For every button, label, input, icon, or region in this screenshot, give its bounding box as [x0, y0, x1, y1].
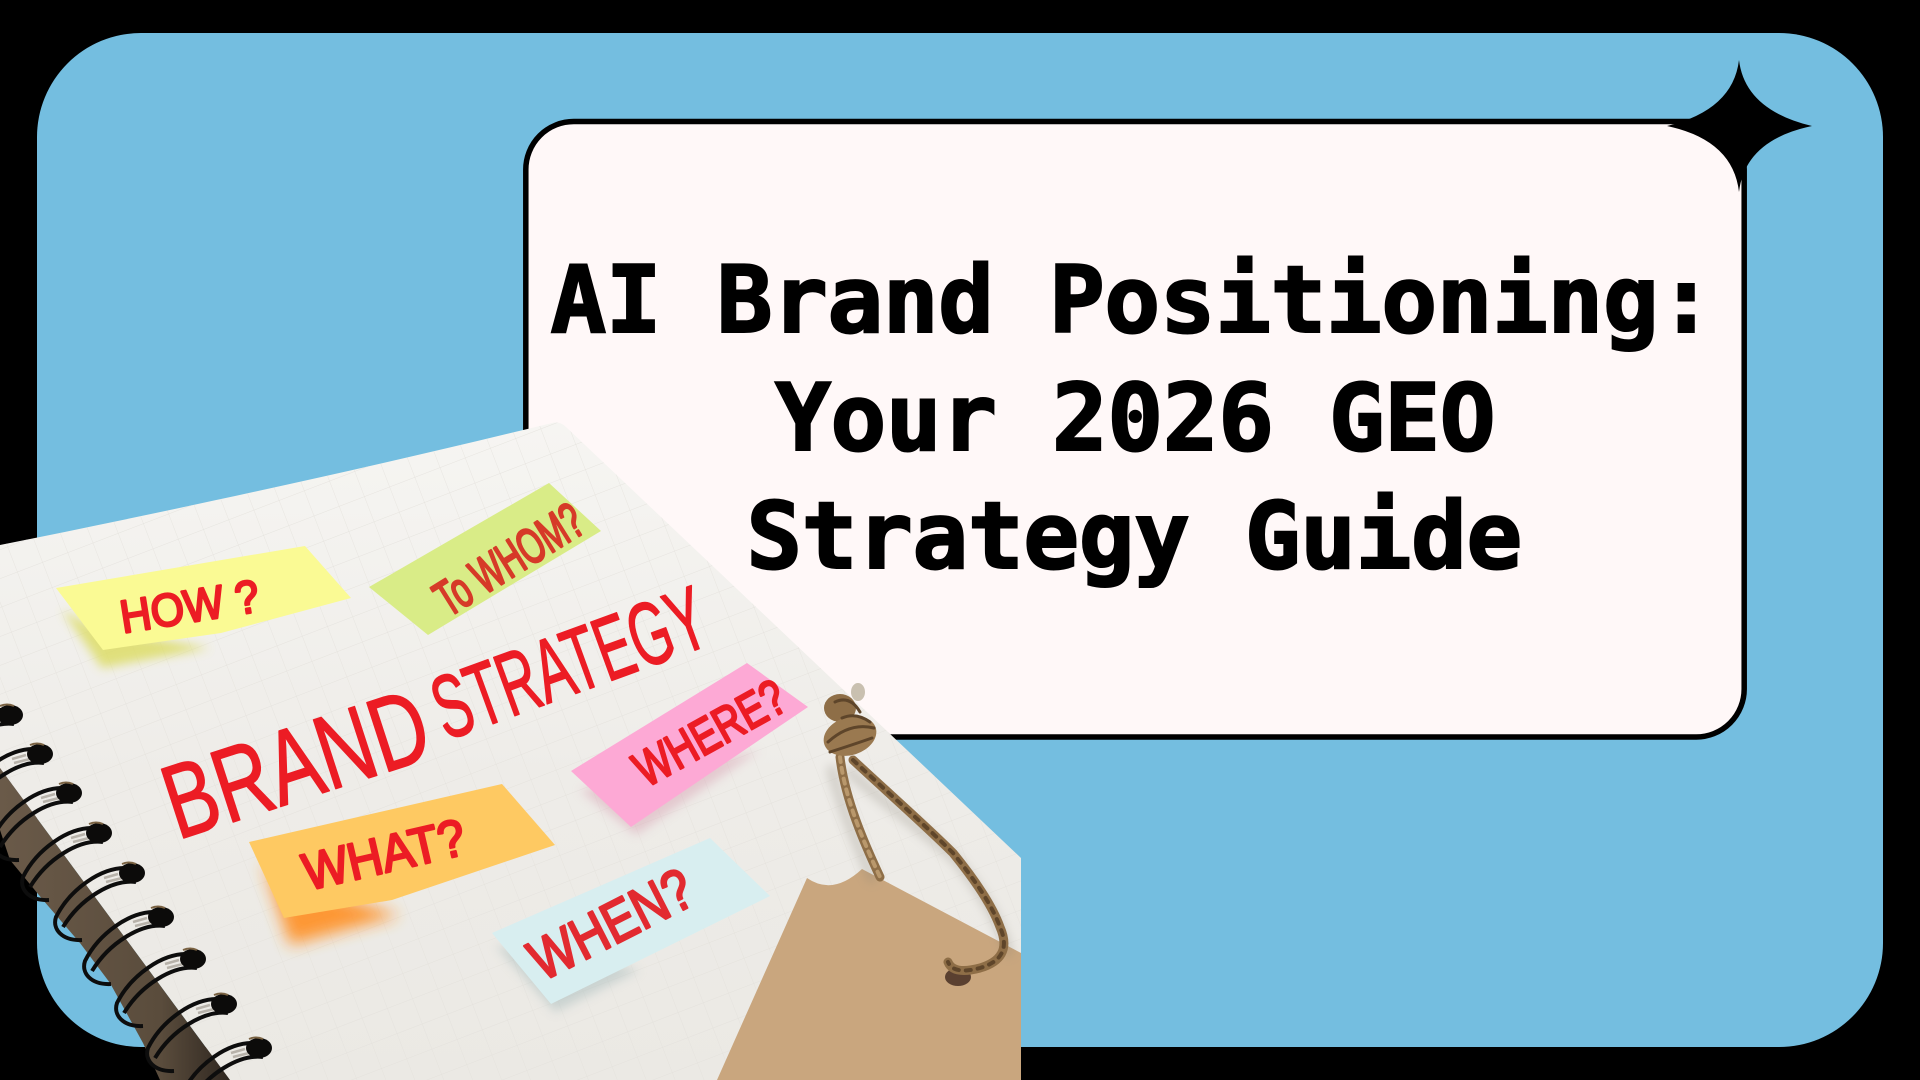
sticky note: how: HOW ?: [116, 570, 263, 643]
title: Strategy Guide: [746, 482, 1522, 590]
sticky note: what: [249, 784, 555, 918]
twine and knot: [818, 683, 1008, 970]
title: Your 2026 GEO: [775, 364, 1495, 472]
sticky note: to whom: To WHOM?: [424, 492, 594, 627]
sticky note: where: WHERE?: [624, 669, 795, 798]
spiral binding: [0, 704, 272, 1080]
icon: four-point star: [1667, 60, 1812, 192]
title: AI Brand Positioning:: [550, 246, 1714, 354]
notebook spine: [0, 768, 230, 1080]
sticky note: what: WHAT?: [297, 809, 471, 902]
kraft paper tag: [717, 869, 1021, 1080]
heading: brand strategy: STRATEGY: [419, 568, 721, 760]
sticky note shadows: [62, 610, 760, 1012]
sticky note: where: [571, 663, 808, 827]
notebook page: [0, 422, 1021, 1080]
title card: [526, 122, 1744, 737]
heading: brand strategy: BRAND: [149, 667, 443, 862]
sticky note: how: [56, 546, 351, 650]
title: [550, 246, 1714, 590]
photo: brand strategy notebook: [0, 422, 1021, 1080]
sticky note: when: WHEN?: [518, 856, 704, 993]
sticky note: to whom: [369, 483, 601, 635]
heading: brand strategy: [149, 568, 721, 862]
